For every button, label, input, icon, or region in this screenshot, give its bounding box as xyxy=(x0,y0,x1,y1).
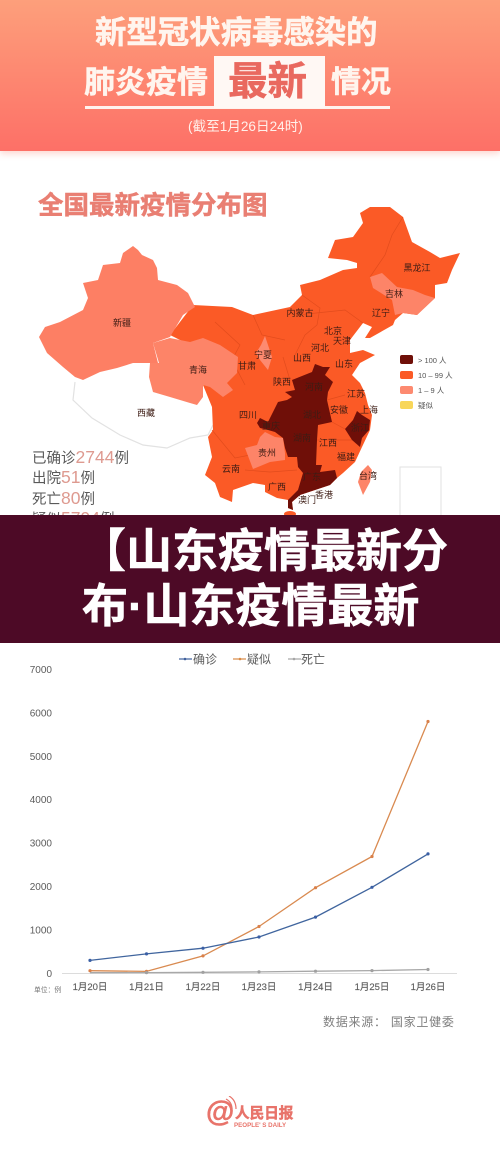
y axis labels: 4000 xyxy=(30,795,52,806)
province: Tibet xyxy=(73,382,213,448)
case totals: 出院51例 xyxy=(32,467,95,487)
province labels: 广东 xyxy=(303,471,321,482)
map legend: 1 – 9 人 xyxy=(418,386,445,395)
header banner xyxy=(0,0,500,157)
y axis labels: 2000 xyxy=(30,882,52,893)
chart legend: 死亡 xyxy=(301,652,325,666)
People's Daily logo xyxy=(206,1096,294,1129)
province labels: 香港 xyxy=(315,489,333,500)
x axis date labels: 1月25日 xyxy=(355,982,389,993)
x axis date labels xyxy=(73,982,445,993)
x axis date labels: 1月23日 xyxy=(242,982,276,993)
x axis date labels: 1月20日 xyxy=(73,982,107,993)
map legend: > 100 人 xyxy=(418,356,447,365)
province labels: 陕西 xyxy=(273,376,291,387)
y axis labels: 5000 xyxy=(30,752,52,763)
provinces 10-99 cases xyxy=(170,207,460,510)
province labels: 广西 xyxy=(268,481,286,492)
province: Taiwan xyxy=(358,465,372,495)
x axis date labels: 1月22日 xyxy=(186,982,220,993)
chart legend xyxy=(179,652,325,666)
provinces over 100 cases xyxy=(257,364,337,510)
logo at symbol: @ xyxy=(206,1096,234,1128)
y axis labels: 6000 xyxy=(30,708,52,720)
series: confirmed xyxy=(88,852,430,962)
province: Xinjiang xyxy=(39,246,195,380)
province: Ningxia xyxy=(256,336,272,370)
highlight box xyxy=(214,56,325,108)
province labels: 山东 xyxy=(335,358,353,369)
province labels: 湖北 xyxy=(303,410,321,420)
case totals: 死亡80例 xyxy=(32,488,95,508)
province labels: 内蒙古 xyxy=(286,307,314,318)
province labels: 江西 xyxy=(319,438,337,448)
province labels: 宁夏 xyxy=(254,349,272,360)
province: Qinghai xyxy=(149,338,238,405)
series: suspected xyxy=(88,720,430,973)
province labels: 吉林 xyxy=(385,288,403,299)
province labels: 安徽 xyxy=(330,404,348,415)
overlay line 1: 【山东疫情最新分 xyxy=(80,525,448,577)
chart legend: 确诊 xyxy=(193,652,217,666)
province labels: 湖南 xyxy=(293,432,311,443)
province labels xyxy=(113,262,431,505)
province: Hainan xyxy=(284,511,296,517)
province labels: 青海 xyxy=(189,364,207,375)
map legend xyxy=(400,355,453,410)
y axis labels: 7000 xyxy=(30,665,52,676)
y axis labels: 1000 xyxy=(30,926,52,936)
date note: (截至1月26日24时) xyxy=(188,119,303,134)
province labels: 甘肃 xyxy=(238,360,256,371)
logo signal arcs xyxy=(226,1096,237,1109)
x axis date labels: 1月24日 xyxy=(298,982,333,993)
title line 2 left: 肺炎疫情 xyxy=(84,65,208,100)
province labels: 西藏 xyxy=(137,407,155,418)
underline xyxy=(85,106,390,109)
province labels: 北京 xyxy=(324,325,342,336)
China epidemic map xyxy=(39,207,460,515)
province labels: 江苏 xyxy=(347,388,365,399)
province labels: 黑龙江 xyxy=(403,262,431,273)
province labels: 重庆 xyxy=(262,420,280,431)
province labels: 云南 xyxy=(222,463,240,474)
province labels: 澳门 xyxy=(298,494,316,505)
province labels: 浙江 xyxy=(351,422,369,433)
province labels: 山西 xyxy=(293,353,311,363)
province labels: 福建 xyxy=(337,451,355,462)
province: Jilin xyxy=(370,273,435,315)
title line 1: 新型冠状病毒感染的 xyxy=(95,15,378,50)
province labels: 河北 xyxy=(311,342,329,353)
title overlay banner xyxy=(0,515,500,643)
logo english name: PEOPLE' S DAILY xyxy=(234,1122,286,1129)
province labels: 河南 xyxy=(305,381,323,392)
series: deaths xyxy=(90,968,430,974)
province: Guizhou xyxy=(245,432,285,469)
y axis labels: 0 xyxy=(46,969,52,980)
y axis labels xyxy=(30,665,52,980)
province labels: 新疆 xyxy=(113,317,131,328)
chart legend: 疑似 xyxy=(247,652,271,666)
case totals xyxy=(32,448,129,515)
y axis labels: 3000 xyxy=(30,838,52,850)
map legend: 10 – 99 人 xyxy=(418,371,453,380)
highlight text: 最新 xyxy=(228,60,307,104)
header background xyxy=(0,0,500,151)
province labels: 四川 xyxy=(239,410,257,420)
map heading: 全国最新疫情分布图 xyxy=(38,192,268,220)
province: Zhejiang xyxy=(345,411,370,447)
title line 2 right: 情况 xyxy=(331,66,391,99)
unit label: 单位：例 xyxy=(34,985,61,994)
data source: 数据来源： 国家卫健委 xyxy=(323,1015,455,1029)
overlay line 2: 布·山东疫情最新 xyxy=(82,580,419,632)
province labels: 辽宁 xyxy=(372,307,390,318)
province labels: 上海 xyxy=(360,404,378,415)
province labels: 天津 xyxy=(333,336,351,346)
province labels: 贵州 xyxy=(258,447,276,458)
province borders xyxy=(212,217,403,472)
south sea inset xyxy=(400,467,441,515)
x axis date labels: 1月21日 xyxy=(129,982,164,993)
x axis xyxy=(62,972,457,974)
map legend: 疑似 xyxy=(418,400,433,410)
logo chinese name: 人民日报 xyxy=(235,1106,293,1122)
x axis date labels: 1月26日 xyxy=(411,982,445,993)
province labels: 台湾 xyxy=(359,470,377,481)
